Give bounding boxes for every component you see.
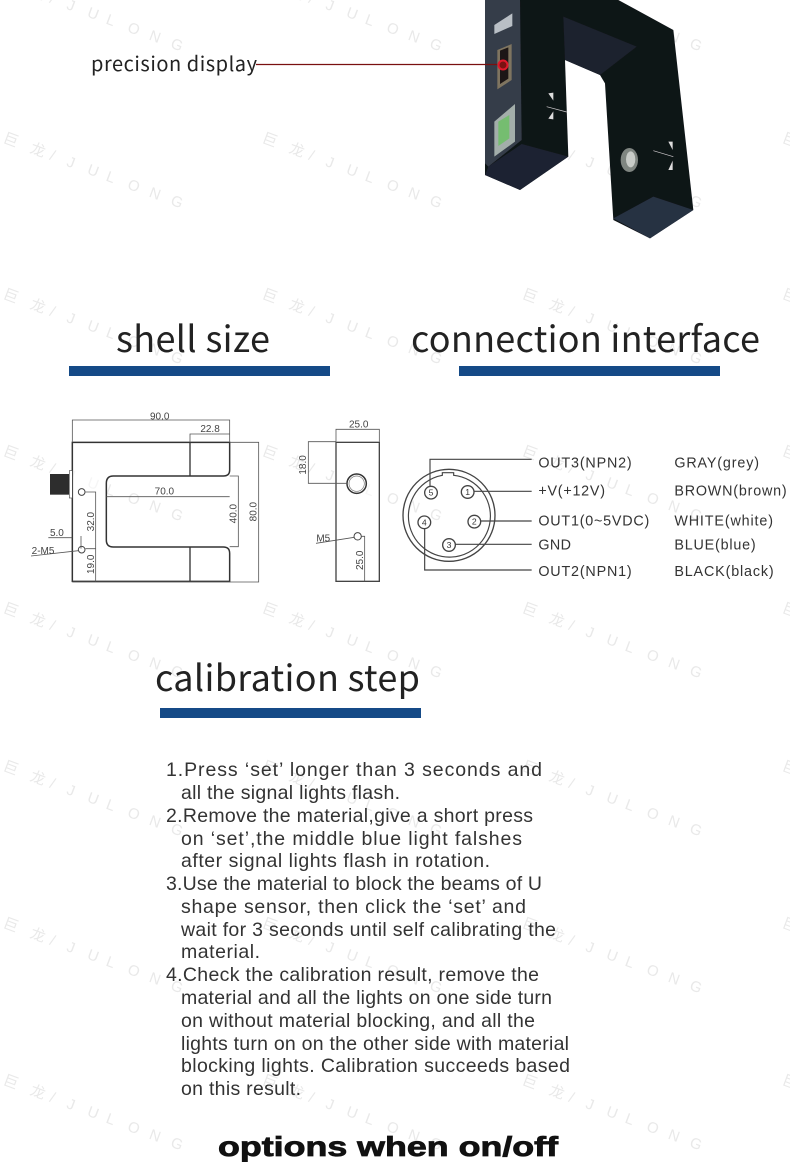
heading: shell size: [69, 311, 330, 376]
shell size dimension drawing: 32.0: [86, 511, 97, 531]
heading: options when on/off: options when on/off: [218, 1131, 559, 1162]
text: 巨龙/JULONG: [260, 915, 444, 997]
calibration steps text: 1.Press ‘set’ longer than 3 seconds and: [166, 759, 542, 781]
calibration steps text: material.: [181, 941, 260, 963]
calibration steps text: 4.Check the calibration result, remove the: [166, 964, 539, 986]
text: 巨龙/JULONG: [1, 130, 185, 212]
text: 巨龙/JULONG: [520, 600, 704, 682]
calibration steps text: after signal lights flash in rotation.: [181, 850, 490, 872]
connection interface pin diagram: BROWN(brown): [674, 483, 787, 499]
front view of sensor: [31, 420, 259, 582]
connection interface pin diagram: 4: [422, 517, 427, 527]
calibration steps text: lights turn on on the other side with material: [181, 1033, 569, 1055]
shell size dimension drawing: 40.0: [229, 503, 240, 523]
text: 巨龙/JULONG: [1, 1072, 185, 1154]
shell size dimension drawing: 25.0: [355, 550, 366, 570]
connection interface pin diagram: OUT1(0~5VDC): [538, 514, 649, 530]
shell size dimension drawing: 25.0: [349, 420, 369, 431]
connection interface pin diagram: +V(+12V): [538, 483, 605, 499]
connection interface pin diagram: 3: [447, 540, 452, 550]
calibration steps text: all the signal lights flash.: [181, 782, 400, 804]
calibration steps text: shape sensor, then click the ‘set’ and: [181, 896, 526, 918]
text: 巨龙/JULONG: [260, 443, 444, 525]
connection interface pin diagram: 5: [429, 488, 434, 498]
text: 巨龙/JULONG: [260, 600, 444, 682]
calibration steps text: material and all the lights on one side turn: [181, 987, 552, 1009]
side view of sensor: [308, 429, 379, 581]
connection interface pin diagram: BLACK(black): [674, 564, 774, 580]
text: 巨龙/JULONG: [1, 443, 185, 525]
label: precision display: precision display: [91, 48, 258, 77]
connection interface pin diagram: WHITE(white): [674, 514, 773, 530]
connection interface pin diagram: [403, 456, 787, 580]
text: 巨龙/JULONG: [260, 758, 444, 840]
text: 巨龙/JULONG: [520, 130, 704, 212]
heading: calibration step: calibration step: [155, 650, 420, 702]
calibration steps text: on this result.: [181, 1078, 301, 1100]
text: 巨龙/JULONG: [1, 758, 185, 840]
shell size dimension drawing: M5: [316, 533, 331, 544]
shell size dimension drawing: 18.0: [298, 455, 309, 475]
text: 巨龙/JULONG: [260, 286, 444, 368]
calibration steps text: on without material blocking, and all the: [181, 1010, 535, 1032]
text: 巨龙/JULONG: [260, 1072, 444, 1154]
shell size dimension drawing: 19.0: [86, 554, 97, 574]
text: 巨龙/JULONG: [1, 286, 185, 368]
shell size dimension drawing: 80.0: [249, 501, 260, 521]
text: 巨龙/JULONG: [1, 600, 185, 682]
shell size dimension drawing: 90.0: [150, 411, 170, 422]
text: 巨龙/JULONG: [520, 758, 704, 840]
connection interface pin diagram: GRAY(grey): [674, 456, 759, 472]
calibration steps text: [166, 759, 570, 1100]
text: 巨龙/JULONG: [520, 286, 704, 368]
calibration steps text: 2.Remove the material,give a short press: [166, 805, 533, 827]
calibration steps text: blocking lights. Calibration succeeds based: [181, 1055, 570, 1077]
text: 巨龙/JULONG: [260, 130, 444, 212]
heading: shell size: shell size: [116, 311, 270, 363]
text: 巨龙/JULONG: [520, 915, 704, 997]
product photo: U-shape sensor: [485, 0, 693, 238]
shell size dimension drawing: 2-M5: [32, 546, 55, 557]
shell size dimension drawing: 22.8: [200, 424, 220, 435]
text: 巨龙/JULONG: [1, 915, 185, 997]
connection interface pin diagram: OUT2(NPN1): [538, 564, 632, 580]
calibration steps text: on ‘set’,the middle blue light falshes: [181, 828, 522, 850]
text: 巨龙/JULONG: [520, 1072, 704, 1154]
calibration steps text: wait for 3 seconds until self calibrating the: [180, 919, 556, 941]
connection interface pin diagram: 2: [472, 517, 477, 527]
text: 巨龙/JULONG: [520, 443, 704, 525]
shell size dimension drawing: 5.0: [50, 528, 64, 539]
connection interface pin diagram: BLUE(blue): [674, 537, 756, 553]
connection interface pin diagram: GND: [538, 537, 571, 553]
shell size dimension drawing: 70.0: [155, 487, 175, 498]
label: precision display: [91, 48, 508, 77]
shell size dimension drawing: [31, 411, 379, 582]
connector circle and pins: [403, 459, 532, 570]
connection interface pin diagram: OUT3(NPN2): [538, 456, 632, 472]
heading: connection interface: connection interface: [411, 311, 760, 363]
connection interface pin diagram: 1: [465, 487, 470, 497]
calibration steps text: 3.Use the material to block the beams of U: [166, 873, 542, 895]
